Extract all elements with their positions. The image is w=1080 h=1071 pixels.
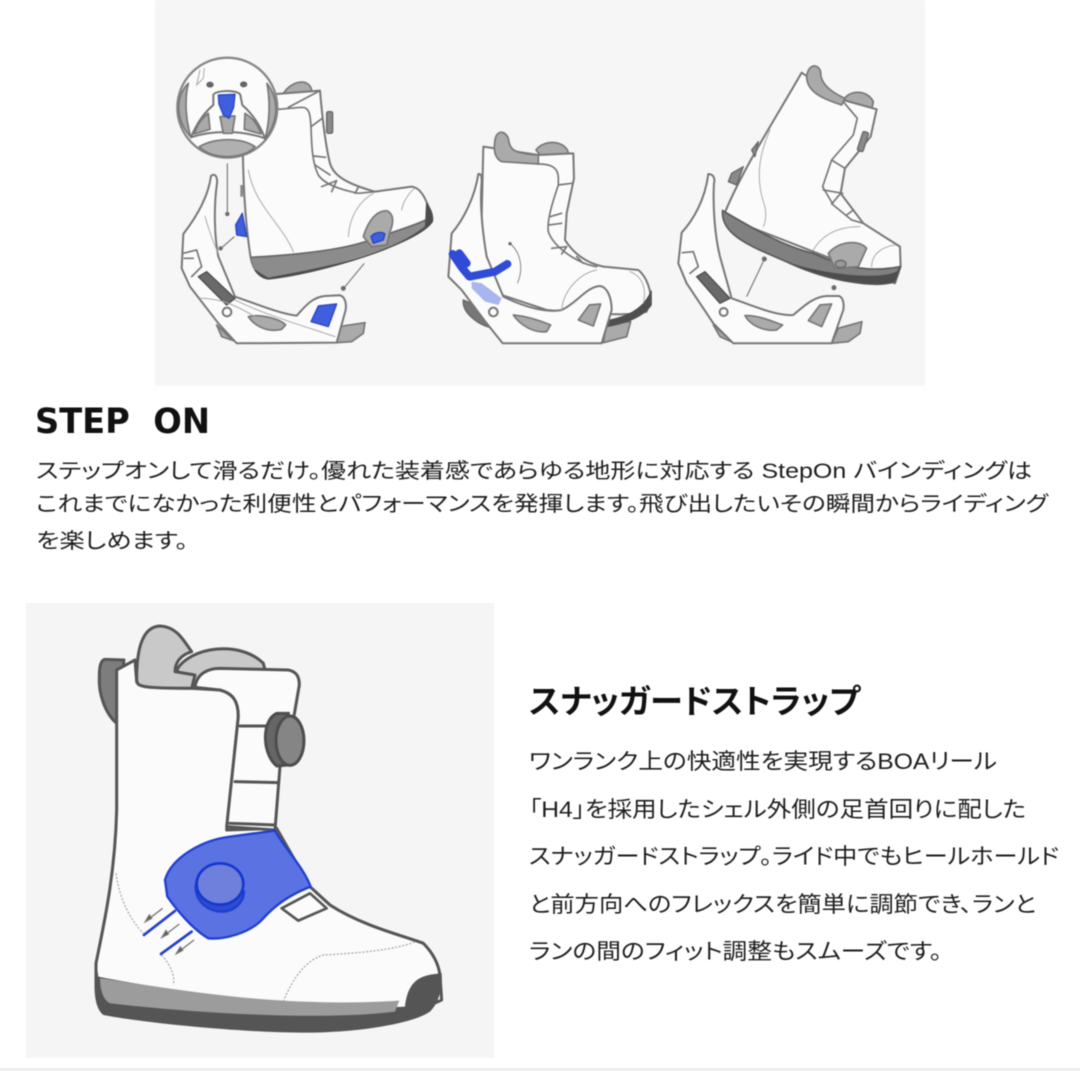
stitching lines (116, 873, 415, 1002)
text block: STEP ON description: を楽しめます。 (36, 530, 188, 553)
heading: STEP ON: STEP ON (35, 402, 210, 442)
text block: STEP ON description: ステップオンして滑るだけ。優れた装着感であらゆる地形に対応する StepOn バインディングは (36, 460, 1032, 483)
boot sole (94, 960, 442, 1033)
text block: STEP ON description (36, 460, 1050, 553)
step 3 raised boot (678, 66, 901, 343)
boot body (96, 660, 442, 1023)
shaft lace section (195, 668, 299, 830)
BOA dial (265, 713, 304, 766)
binding 1 (182, 175, 365, 343)
heading: snug guard strap: スナッガードストラップ (529, 683, 862, 720)
text block: snug guard strap description: スナッガードストラップ。ライド中でもヒールホールド (529, 844, 1059, 869)
inset magnifier circle (177, 58, 277, 158)
text block: STEP ON description: これまでになかった利便性とパフォーマンスを発揮します。飛び出したいその瞬間からライディング (36, 493, 1050, 516)
ankle strap tab (282, 893, 327, 921)
text block: snug guard strap description (529, 749, 1059, 964)
illustration: steps 2 and 3 (448, 66, 901, 343)
text block: snug guard strap description: と前方向へのフレックスを簡単に調節でき、ランと (529, 892, 1036, 917)
blue release lever (472, 282, 502, 305)
arrows: step 1 (219, 163, 364, 290)
bottom edge band (0, 1068, 1080, 1071)
panel: step-on diagram background (155, 0, 925, 386)
text block: snug guard strap description: ランの間のフィット調整もスムーズです。 (529, 939, 942, 964)
text block: snug guard strap description: 「H4」を採用したシェル外側の足首回りに配した (529, 797, 1026, 822)
panel: snug guard strap diagram background (26, 603, 494, 1058)
blue strap webbing and arrows (144, 908, 194, 954)
text block: snug guard strap description: ワンランク上の快適性を実現するBOAリール (529, 749, 997, 774)
blue toe pad (311, 304, 337, 327)
sole (723, 211, 900, 284)
illustration: snowboard boot with highlighted strap (94, 626, 442, 1033)
boot tongue and liner (99, 626, 267, 723)
step 2 boot and binding (448, 132, 651, 343)
boot 1 (236, 82, 433, 279)
illustration: step 1, boot above binding (177, 58, 433, 343)
blue snug guard strap (165, 831, 311, 939)
sole (252, 220, 430, 278)
step 3 binding (713, 325, 733, 343)
